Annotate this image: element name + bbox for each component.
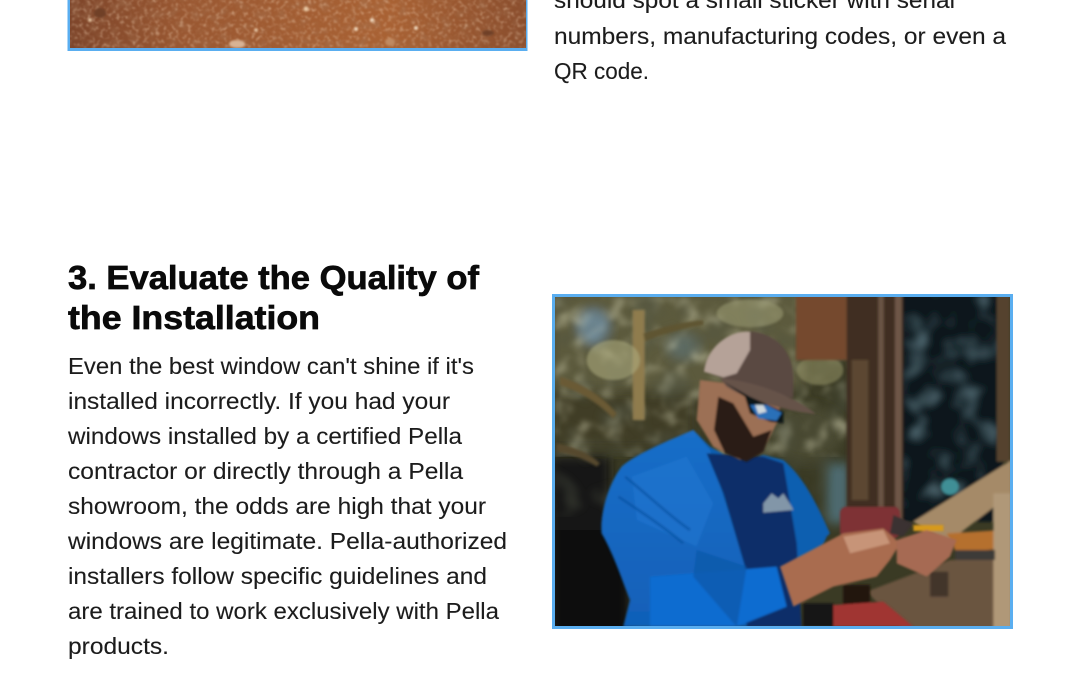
photo: gravel ground (68, 0, 528, 51)
text block: installation paragraph: contractor or directly through a Pella (68, 458, 463, 484)
text block: installation paragraph: installers follow specific guidelines and (68, 563, 487, 589)
heading: the Installation (68, 299, 320, 336)
text block: installation paragraph: products. (68, 633, 169, 659)
worker's blue shirt (601, 430, 830, 627)
text block: installation paragraph: windows installed by a certified Pella (67, 423, 462, 449)
text block: installation paragraph: Even the best window can't shine if it's (68, 353, 474, 379)
photo background: trees (550, 290, 1020, 637)
text block: installation paragraph: are trained to work exclusively with Pella (68, 598, 499, 624)
hands and drill (780, 507, 957, 627)
text block: installation paragraph: installed incorrectly. If you had your (68, 388, 450, 414)
text block: intro paragraph ending: QR code. (554, 58, 649, 84)
text block: intro paragraph ending (554, 0, 1006, 84)
text block: installation paragraph (67, 353, 507, 659)
photo: installer with drill (550, 290, 1020, 637)
text block: installation paragraph: windows are legitimate. Pella-authorized (67, 528, 507, 554)
heading: 3. Evaluate the Quality of (68, 259, 480, 296)
worker's head with cap and sunglasses (697, 332, 816, 462)
text block: intro paragraph ending: numbers, manufacturing codes, or even a (554, 23, 1006, 49)
text block: installation paragraph: showroom, the odds are high that your (68, 493, 486, 519)
photo background: building and window (796, 295, 1012, 637)
heading (68, 259, 480, 336)
